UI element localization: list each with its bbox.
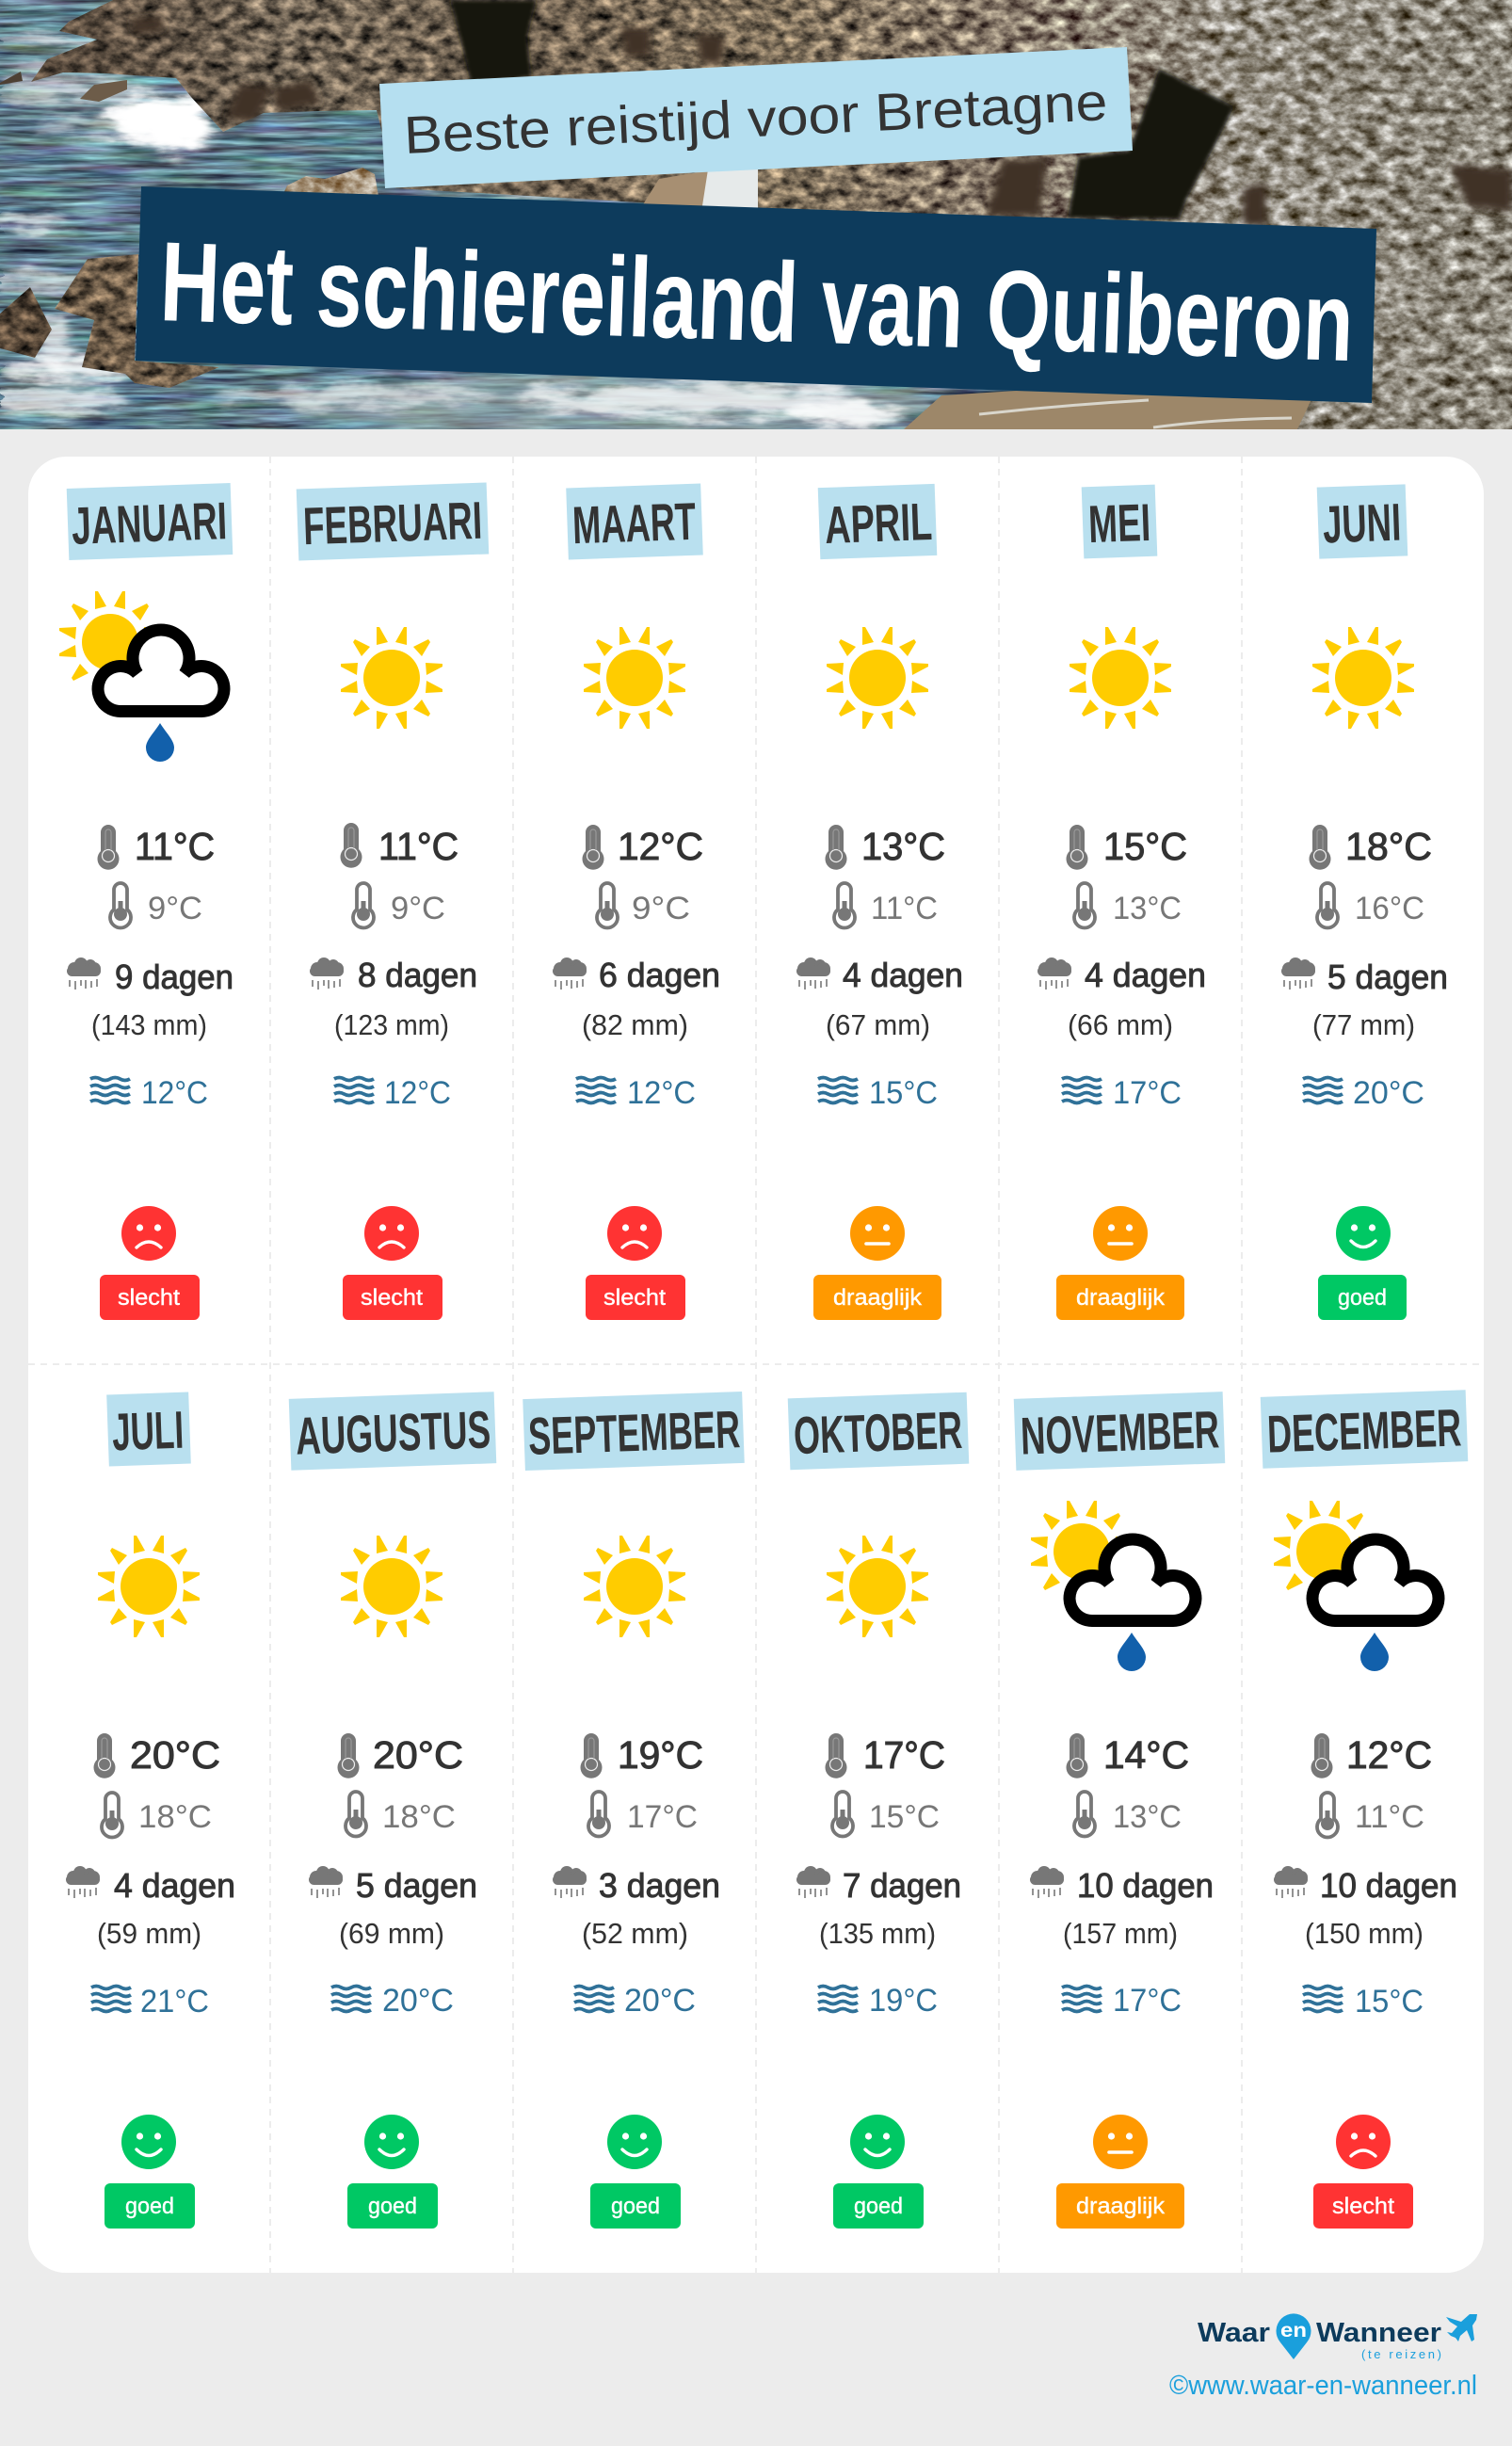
rain days: 6 dagen [599, 956, 720, 994]
sea temperature [1303, 1984, 1424, 2020]
min temperature [597, 883, 690, 927]
panel: februari [297, 482, 489, 1320]
icon: sun [584, 1536, 685, 1637]
min temperature: 16°C [1355, 891, 1424, 926]
rating: goed [347, 2115, 438, 2229]
rating: draaglijk: draaglijk [1076, 2194, 1166, 2219]
heading: september [523, 1392, 745, 1471]
panel: januari [59, 483, 233, 1320]
panel: maart [553, 484, 720, 1320]
heading: januari [67, 483, 233, 560]
sea temperature [818, 1983, 938, 2019]
rain days: 5 dagen [1327, 957, 1448, 996]
min temperature [834, 883, 938, 927]
logo: Waar en Wanneer: en [1280, 2320, 1307, 2341]
icon: sun [341, 1536, 442, 1637]
heading: februari: FEBRUARI [302, 491, 483, 555]
subtitle banner [379, 47, 1133, 188]
rating: goed [1318, 1206, 1407, 1320]
rainfall: (135 mm) [819, 1917, 936, 1950]
logo: Waar en Wanneer: (te reizen) [1361, 2347, 1441, 2361]
rating: draaglijk [1056, 1206, 1184, 1320]
max temperature: 12°C [618, 825, 703, 868]
sea temperature [818, 1075, 938, 1111]
rain days [67, 957, 233, 996]
rating: slecht [586, 1206, 685, 1320]
icon: sun [341, 627, 442, 729]
min temperature [353, 883, 445, 927]
max temperature [98, 825, 215, 870]
panel: september [523, 1392, 745, 2229]
rating: goed: goed [611, 2194, 660, 2219]
min temperature [110, 883, 202, 927]
sea temperature [331, 1983, 454, 2019]
max temperature: 19°C [618, 1733, 703, 1777]
heading: juni: JUNI [1322, 492, 1402, 554]
icon: sun [1070, 627, 1171, 729]
rating: slecht [1313, 2115, 1413, 2229]
max temperature [580, 1733, 703, 1778]
heading: september: SEPTEMBER [527, 1399, 741, 1466]
panel: climate table [28, 457, 1484, 2273]
min temperature: 13°C [1113, 891, 1182, 926]
sea temperature [1062, 1075, 1182, 1111]
max temperature [582, 825, 703, 870]
min temperature: 13°C [1113, 1799, 1182, 1835]
min temperature [588, 1792, 698, 1836]
rainfall: (82 mm) [582, 1008, 688, 1041]
rainfall: (67 mm) [826, 1008, 930, 1041]
max temperature [337, 1733, 463, 1778]
min temperature: 9°C [632, 891, 690, 926]
rainfall: (157 mm) [1063, 1917, 1178, 1950]
icon: sun behind rain cloud [1274, 1501, 1439, 1671]
rainfall: (150 mm) [1305, 1917, 1424, 1950]
rainfall: (52 mm) [582, 1917, 688, 1950]
max temperature: 18°C [1345, 825, 1432, 868]
rating: slecht: slecht [361, 1285, 423, 1311]
max temperature: 14°C [1103, 1733, 1189, 1777]
rating: draaglijk [1056, 2115, 1184, 2229]
rating: goed: goed [854, 2194, 903, 2219]
max temperature: 15°C [1103, 825, 1187, 868]
heading: november [1014, 1392, 1225, 1471]
max temperature: 20°C [373, 1733, 463, 1777]
min temperature [102, 1793, 212, 1837]
min temperature: 9°C [391, 891, 445, 926]
icon: sun [827, 1536, 928, 1637]
max temperature: 12°C [1346, 1733, 1432, 1777]
panel: juni [1281, 484, 1448, 1320]
rating: slecht [343, 1206, 442, 1320]
rain days: 4 dagen [843, 956, 963, 994]
heading: juli: JULI [111, 1400, 185, 1461]
website url: ©www.waar-en-wanneer.nl [1169, 2371, 1477, 2401]
rainfall: (123 mm) [334, 1008, 449, 1041]
rain days: 8 dagen [358, 956, 477, 994]
min temperature [1317, 1793, 1424, 1837]
rainfall: (77 mm) [1312, 1008, 1415, 1041]
sea temperature: 15°C [869, 1075, 938, 1111]
heading: oktober: OKTOBER [793, 1400, 963, 1465]
sea temperature [574, 1983, 696, 2019]
panel: oktober [788, 1392, 969, 2229]
rain days: 7 dagen [843, 1866, 961, 1905]
max temperature: 11°C [135, 825, 215, 868]
logo: Waar en Wanneer: Waar [1198, 2318, 1270, 2348]
sea temperature: 20°C [382, 1983, 454, 2019]
max temperature: 20°C [130, 1733, 220, 1777]
panel: augustus [289, 1392, 496, 2229]
panel: april [796, 484, 963, 1320]
min temperature: 11°C [871, 891, 938, 926]
max temperature [1066, 1733, 1189, 1778]
max temperature: 11°C [378, 825, 458, 868]
max temperature: 13°C [861, 825, 945, 868]
rating: goed: goed [368, 2194, 417, 2219]
min temperature [1074, 883, 1182, 927]
sea temperature: 15°C [1355, 1984, 1424, 2020]
rating: goed [833, 2115, 924, 2229]
heading: augustus [289, 1392, 496, 1471]
sea temperature: 20°C [1353, 1075, 1424, 1111]
icon: sun behind rain cloud [1031, 1501, 1196, 1671]
panel: mei [1037, 485, 1206, 1320]
rain days: 10 dagen [1077, 1866, 1214, 1905]
min temperature [832, 1792, 940, 1836]
sea temperature: 12°C [141, 1075, 208, 1111]
icon: sun [584, 627, 685, 729]
rain days: 3 dagen [599, 1866, 720, 1905]
panel: november [1014, 1392, 1225, 2229]
min temperature [1317, 883, 1424, 927]
icon: sun [827, 627, 928, 729]
max temperature [1309, 825, 1432, 870]
heading: maart: MAART [571, 491, 697, 555]
sea temperature [334, 1075, 451, 1111]
rating: slecht: slecht [603, 1285, 666, 1311]
max temperature [94, 1733, 220, 1778]
rating: goed: goed [125, 2194, 174, 2219]
panel: december [1261, 1390, 1468, 2229]
rating: goed [590, 2115, 681, 2229]
max temperature [1311, 1733, 1432, 1778]
max temperature: 17°C [863, 1733, 945, 1777]
icon: sun [1312, 627, 1414, 729]
hero photo: rocky coast and sea [0, 0, 1512, 437]
sea temperature: 21°C [140, 1984, 209, 2020]
icon: sun behind rain cloud [59, 591, 224, 762]
heading: november: NOVEMBER [1020, 1399, 1220, 1466]
max temperature [825, 1733, 945, 1778]
sea temperature [90, 1075, 208, 1111]
logo: Waar en Wanneer: Wanneer [1316, 2318, 1441, 2348]
rainfall: (59 mm) [97, 1917, 201, 1950]
heading: augustus: AUGUSTUS [295, 1399, 491, 1466]
max temperature [341, 823, 458, 868]
subtitle banner: Beste reistijd voor Bretagne [403, 72, 1109, 165]
heading: juli [106, 1392, 191, 1466]
heading: mei [1082, 485, 1157, 558]
rating: goed: goed [1338, 1285, 1387, 1311]
rain days: 10 dagen [1320, 1866, 1457, 1905]
rain days: 9 dagen [115, 957, 233, 996]
sea temperature: 12°C [384, 1075, 451, 1111]
rating: slecht [100, 1206, 200, 1320]
rain days: 4 dagen [114, 1866, 235, 1905]
heading: februari [297, 482, 489, 561]
min temperature: 15°C [869, 1799, 940, 1835]
heading: oktober [788, 1392, 969, 1470]
min temperature: 11°C [1355, 1799, 1424, 1835]
min temperature [346, 1792, 456, 1836]
rating: draaglijk [813, 1206, 941, 1320]
rating: slecht: slecht [118, 1285, 180, 1311]
heading: april: APRIL [824, 491, 933, 555]
min temperature: 18°C [382, 1799, 456, 1835]
min temperature: 17°C [627, 1799, 698, 1835]
sea temperature [91, 1984, 209, 2020]
rating: slecht: slecht [1332, 2194, 1394, 2219]
max temperature [825, 825, 945, 870]
sea temperature: 20°C [624, 1983, 696, 2019]
min temperature [1074, 1792, 1182, 1836]
sea temperature [1303, 1075, 1424, 1111]
heading: januari: JANUARI [71, 491, 228, 555]
sea temperature: 17°C [1113, 1075, 1182, 1111]
icon: sun [98, 1536, 200, 1637]
sea temperature: 12°C [627, 1075, 696, 1111]
logo: Waar en Wanneer [1198, 2313, 1477, 2361]
rating: goed [105, 2115, 195, 2229]
rainfall: (143 mm) [91, 1008, 207, 1041]
rating: draaglijk: draaglijk [833, 1285, 923, 1311]
rainfall: (66 mm) [1068, 1008, 1173, 1041]
sea temperature [576, 1075, 696, 1111]
sea temperature: 19°C [869, 1983, 938, 2019]
max temperature [1066, 825, 1187, 870]
rain days: 4 dagen [1085, 956, 1206, 994]
min temperature: 9°C [148, 891, 202, 926]
rating: draaglijk: draaglijk [1076, 1285, 1166, 1311]
heading: april [818, 484, 937, 559]
sea temperature: 17°C [1113, 1983, 1182, 2019]
heading: juni [1317, 484, 1407, 559]
panel: juli [66, 1392, 235, 2229]
rainfall: (69 mm) [339, 1917, 444, 1950]
heading: mei: MEI [1087, 492, 1151, 554]
heading: maart [566, 484, 703, 559]
sea temperature [1062, 1983, 1182, 2019]
rain days: 5 dagen [356, 1866, 477, 1905]
min temperature: 18°C [138, 1799, 212, 1835]
